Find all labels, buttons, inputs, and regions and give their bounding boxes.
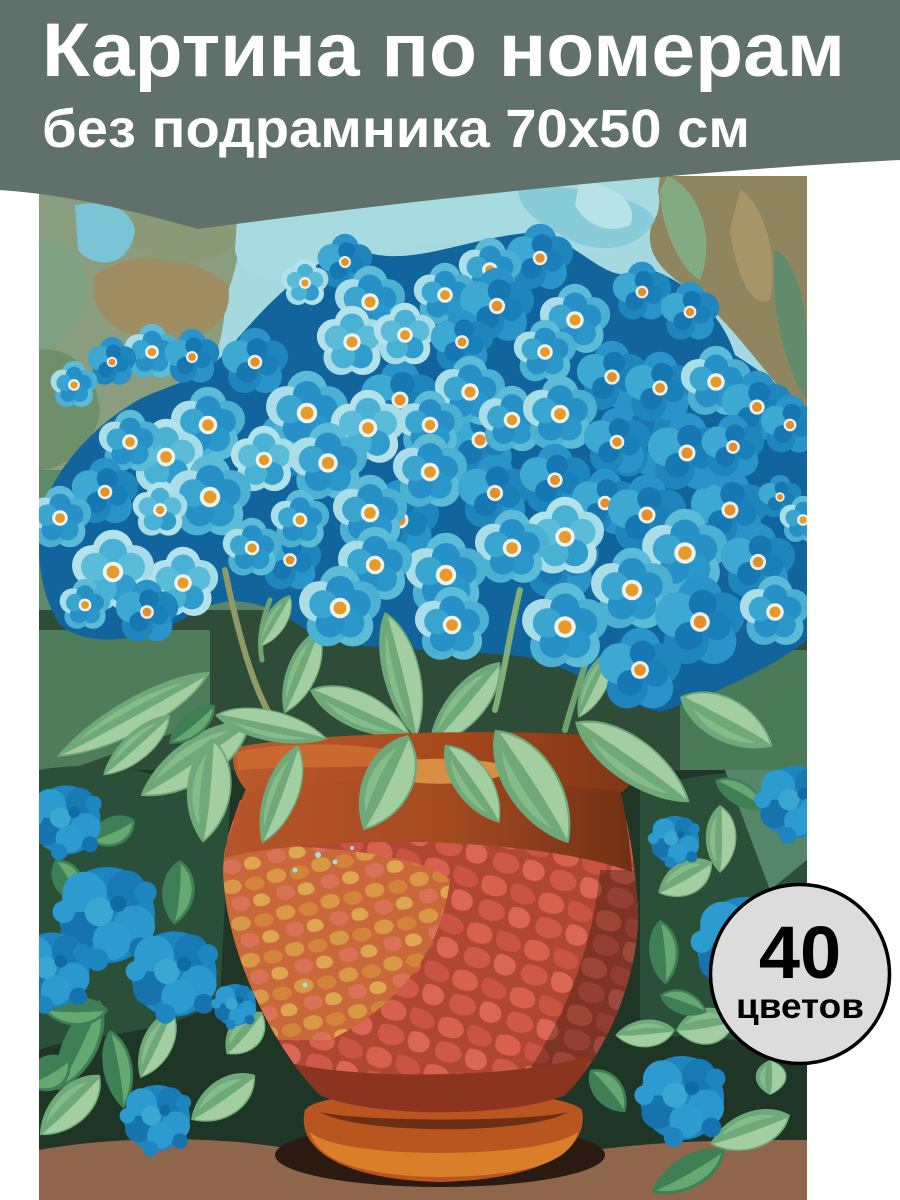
painting: terracotta pot [215,732,645,1187]
painting [10,176,832,1200]
pot belly [215,790,645,1120]
badge: 40 colours [710,884,890,1064]
subtitle: без подрамника 70х50 см [42,99,750,159]
badge number: 40 [759,911,841,994]
pot upper band [224,774,632,872]
header banner [0,0,900,229]
pot rim [233,732,642,792]
title: Картина по номерам [42,8,845,93]
painting: garden background [39,176,807,1200]
badge label: цветов [736,987,864,1026]
painting: lower side foliage [19,769,797,1200]
painting: hydrangea blooms [10,766,832,1156]
painting: flower stems [225,570,590,730]
pot base saucer [304,1091,583,1182]
painting: forget-me-not flowers [29,224,826,708]
painting: dark mass behind flowers [39,232,807,712]
painting: leaves around pot (behind) [49,590,784,786]
painting: ground [39,1139,807,1200]
pot shadow [275,1136,605,1187]
painting: leaves draped over pot [140,704,690,844]
